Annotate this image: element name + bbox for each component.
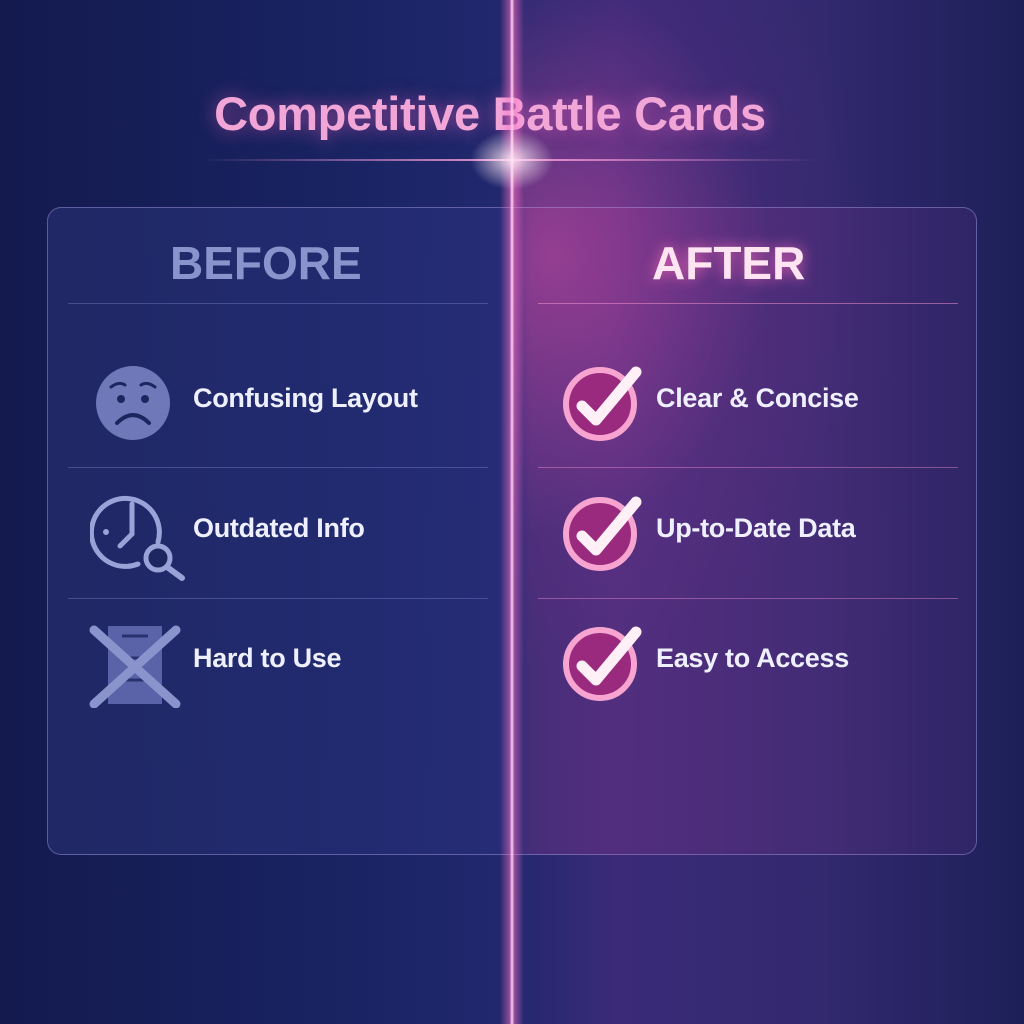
text: hard to use: Hard to Use — [193, 643, 341, 673]
title: Competitive Battle Cards — [214, 87, 766, 140]
icon: sad face — [96, 366, 170, 440]
icon: check 3 — [563, 626, 642, 701]
icon: crossed document — [90, 626, 180, 708]
text: clear & concise: Clear & Concise — [656, 383, 859, 413]
heading: after: AFTER — [652, 237, 805, 289]
text: confusing layout: Confusing Layout — [193, 383, 418, 413]
heading: before: BEFORE — [170, 237, 362, 289]
text: easy to access: Easy to Access — [656, 643, 849, 673]
panel: comparison — [47, 207, 977, 855]
icon: clock with magnifier — [90, 496, 185, 581]
text: up-to-date data: Up-to-Date Data — [656, 513, 856, 543]
text: outdated info: Outdated Info — [193, 513, 365, 543]
icon: check 2 — [563, 496, 642, 571]
icon: check 1 — [563, 366, 642, 441]
divider glow line — [500, 0, 524, 1024]
